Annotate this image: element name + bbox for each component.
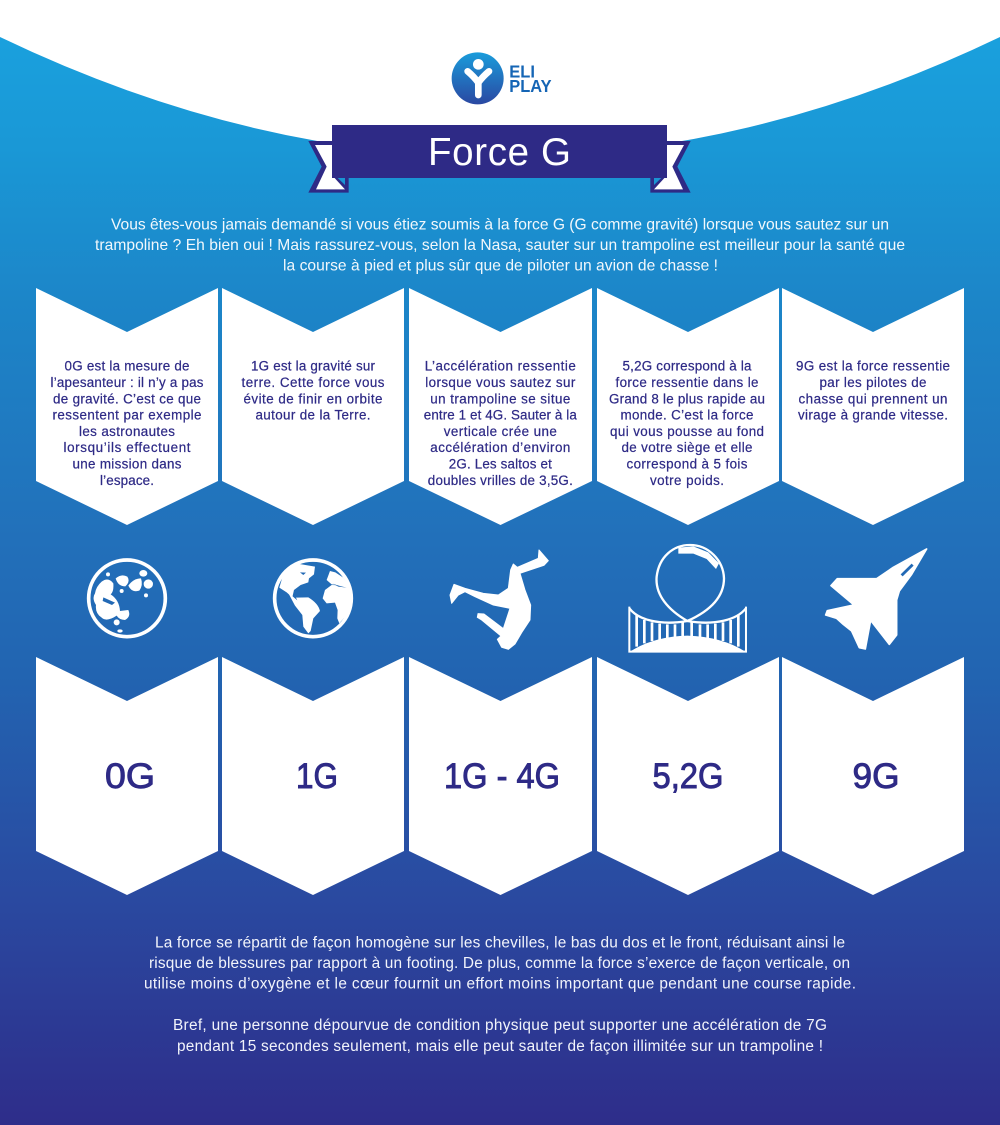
closing text: Bref, une personne dépourvue de condition physique peut supporter une accélération de 7G (173, 1017, 827, 1034)
panel: 5,2G description: qui vous pousse au fond (610, 424, 764, 439)
panel: 5,2G description: Grand 8 le plus rapide au (609, 391, 765, 406)
closing text: utilise moins d’oxygène et le cœur fournit un effort moins important que pendant une course rapide. (144, 976, 856, 992)
panel: 5,2G description: force ressentie dans le (616, 375, 758, 390)
panel: 5,2G description (597, 288, 779, 525)
panel: 0G description: une mission dans (72, 456, 182, 472)
title text: Force G (428, 131, 571, 174)
icon: roller coaster (629, 545, 746, 652)
ribbon band (332, 125, 667, 178)
panel: 9G description: virage à grande vitesse. (798, 408, 948, 423)
panel: 5,2G value: 5,2G (652, 757, 724, 796)
panel: 5,2G description: de votre siège et elle (622, 440, 752, 455)
panel: 5,2G description: 5,2G correspond à la (622, 359, 752, 374)
panel: trampoline description: L’accélération ressentie (425, 359, 576, 374)
panel: 9G description: 9G est la force ressentie (796, 359, 950, 374)
ribbon left tail (308, 141, 349, 193)
closing text: risque de blessures par rapport à un footing. De plus, comme la force s’exerce de façon verticale, on (149, 955, 850, 972)
panel: trampoline description: un trampoline se situe (430, 391, 570, 406)
title ribbon (308, 125, 691, 193)
panel: 0G description: les astronautes (79, 424, 175, 439)
panel: 1G description: terre. Cette force vous (242, 375, 385, 390)
icon: earth globe (275, 560, 352, 637)
panel: trampoline description: entre 1 et 4G. Sauter à la (424, 408, 577, 423)
introduction text: la course à pied et plus sûr que de piloter un avion de chasse ! (283, 258, 718, 274)
panel: 0G description: l’apesanteur : il n’y a pas (50, 375, 204, 390)
panel: trampoline description (409, 288, 592, 525)
panel: 0G description: ressentent par exemple (52, 408, 202, 423)
white curved header (0, 0, 1000, 157)
panel: 1G description: autour de la Terre. (256, 408, 370, 423)
logo: Eli Play (452, 52, 552, 104)
panel: 5,2G description: votre poids. (650, 473, 724, 488)
logo: Eli Play: ELI (509, 62, 535, 82)
panel: 1G description (222, 288, 404, 525)
introduction text: Vous êtes-vous jamais demandé si vous étiez soumis à la force G (G comme gravité) lorsque vous sautez sur un (111, 216, 889, 234)
closing text: pendant 15 secondes seulement, mais elle peut sauter de façon illimitée sur un trampoline ! (177, 1038, 823, 1055)
panel: 1G description: 1G est la gravité sur (251, 359, 376, 374)
panel: 9G value: 9G (852, 757, 900, 796)
panel: trampoline description: lorsque vous sautez sur (425, 375, 576, 390)
logo: Eli Play: PLAY (509, 76, 552, 96)
panel: 0G description: 0G est la mesure de (64, 359, 190, 374)
panel: 5,2G description: monde. C’est la force (620, 408, 754, 423)
closing text: La force se répartit de façon homogène sur les chevilles, le bas du dos et le front, réduisant ainsi le (155, 935, 845, 952)
panel: trampoline description: doubles vrilles de 3,5G. (428, 473, 573, 488)
ribbon right tail (650, 141, 691, 193)
icon: fighter jet (826, 549, 927, 649)
panel: 9G description (782, 288, 964, 525)
introduction text (95, 216, 905, 274)
panel: 0G description (36, 288, 218, 525)
icon: moon (89, 560, 165, 637)
panel: 0G description: lorsqu’ils effectuent (64, 440, 191, 455)
panel: 1G description: évite de finir en orbite (244, 391, 382, 406)
panel: 5,2G value (597, 657, 779, 895)
panel: 0G description: de gravité. C’est ce que (53, 391, 201, 406)
panel: 1G value (222, 657, 404, 895)
panel: 9G description: chasse qui prennent un (798, 391, 948, 406)
panel: 5,2G description: correspond à 5 fois (626, 456, 748, 472)
panel: 1G - 4G value (409, 657, 592, 895)
closing text (144, 935, 856, 1055)
panel: 1G value: 1G (296, 757, 338, 796)
panel: 9G description: par les pilotes de (820, 375, 926, 390)
panel: trampoline description: accélération d’environ (430, 440, 570, 455)
panel: 1G - 4G value: 1G - 4G (444, 757, 560, 796)
icon: jumping person (450, 550, 548, 649)
panel: 9G value (782, 657, 964, 895)
panel: 0G value: 0G (105, 757, 155, 796)
panel: trampoline description: verticale crée une (444, 424, 557, 439)
panel: 0G description: l’espace. (100, 473, 154, 488)
panel: trampoline description: 2G. Les saltos et (449, 456, 552, 472)
panel: 0G value (36, 657, 218, 895)
introduction text: trampoline ? Eh bien oui ! Mais rassurez-vous, selon la Nasa, sauter sur un trampoline est meilleur pour la santé que (95, 237, 905, 254)
